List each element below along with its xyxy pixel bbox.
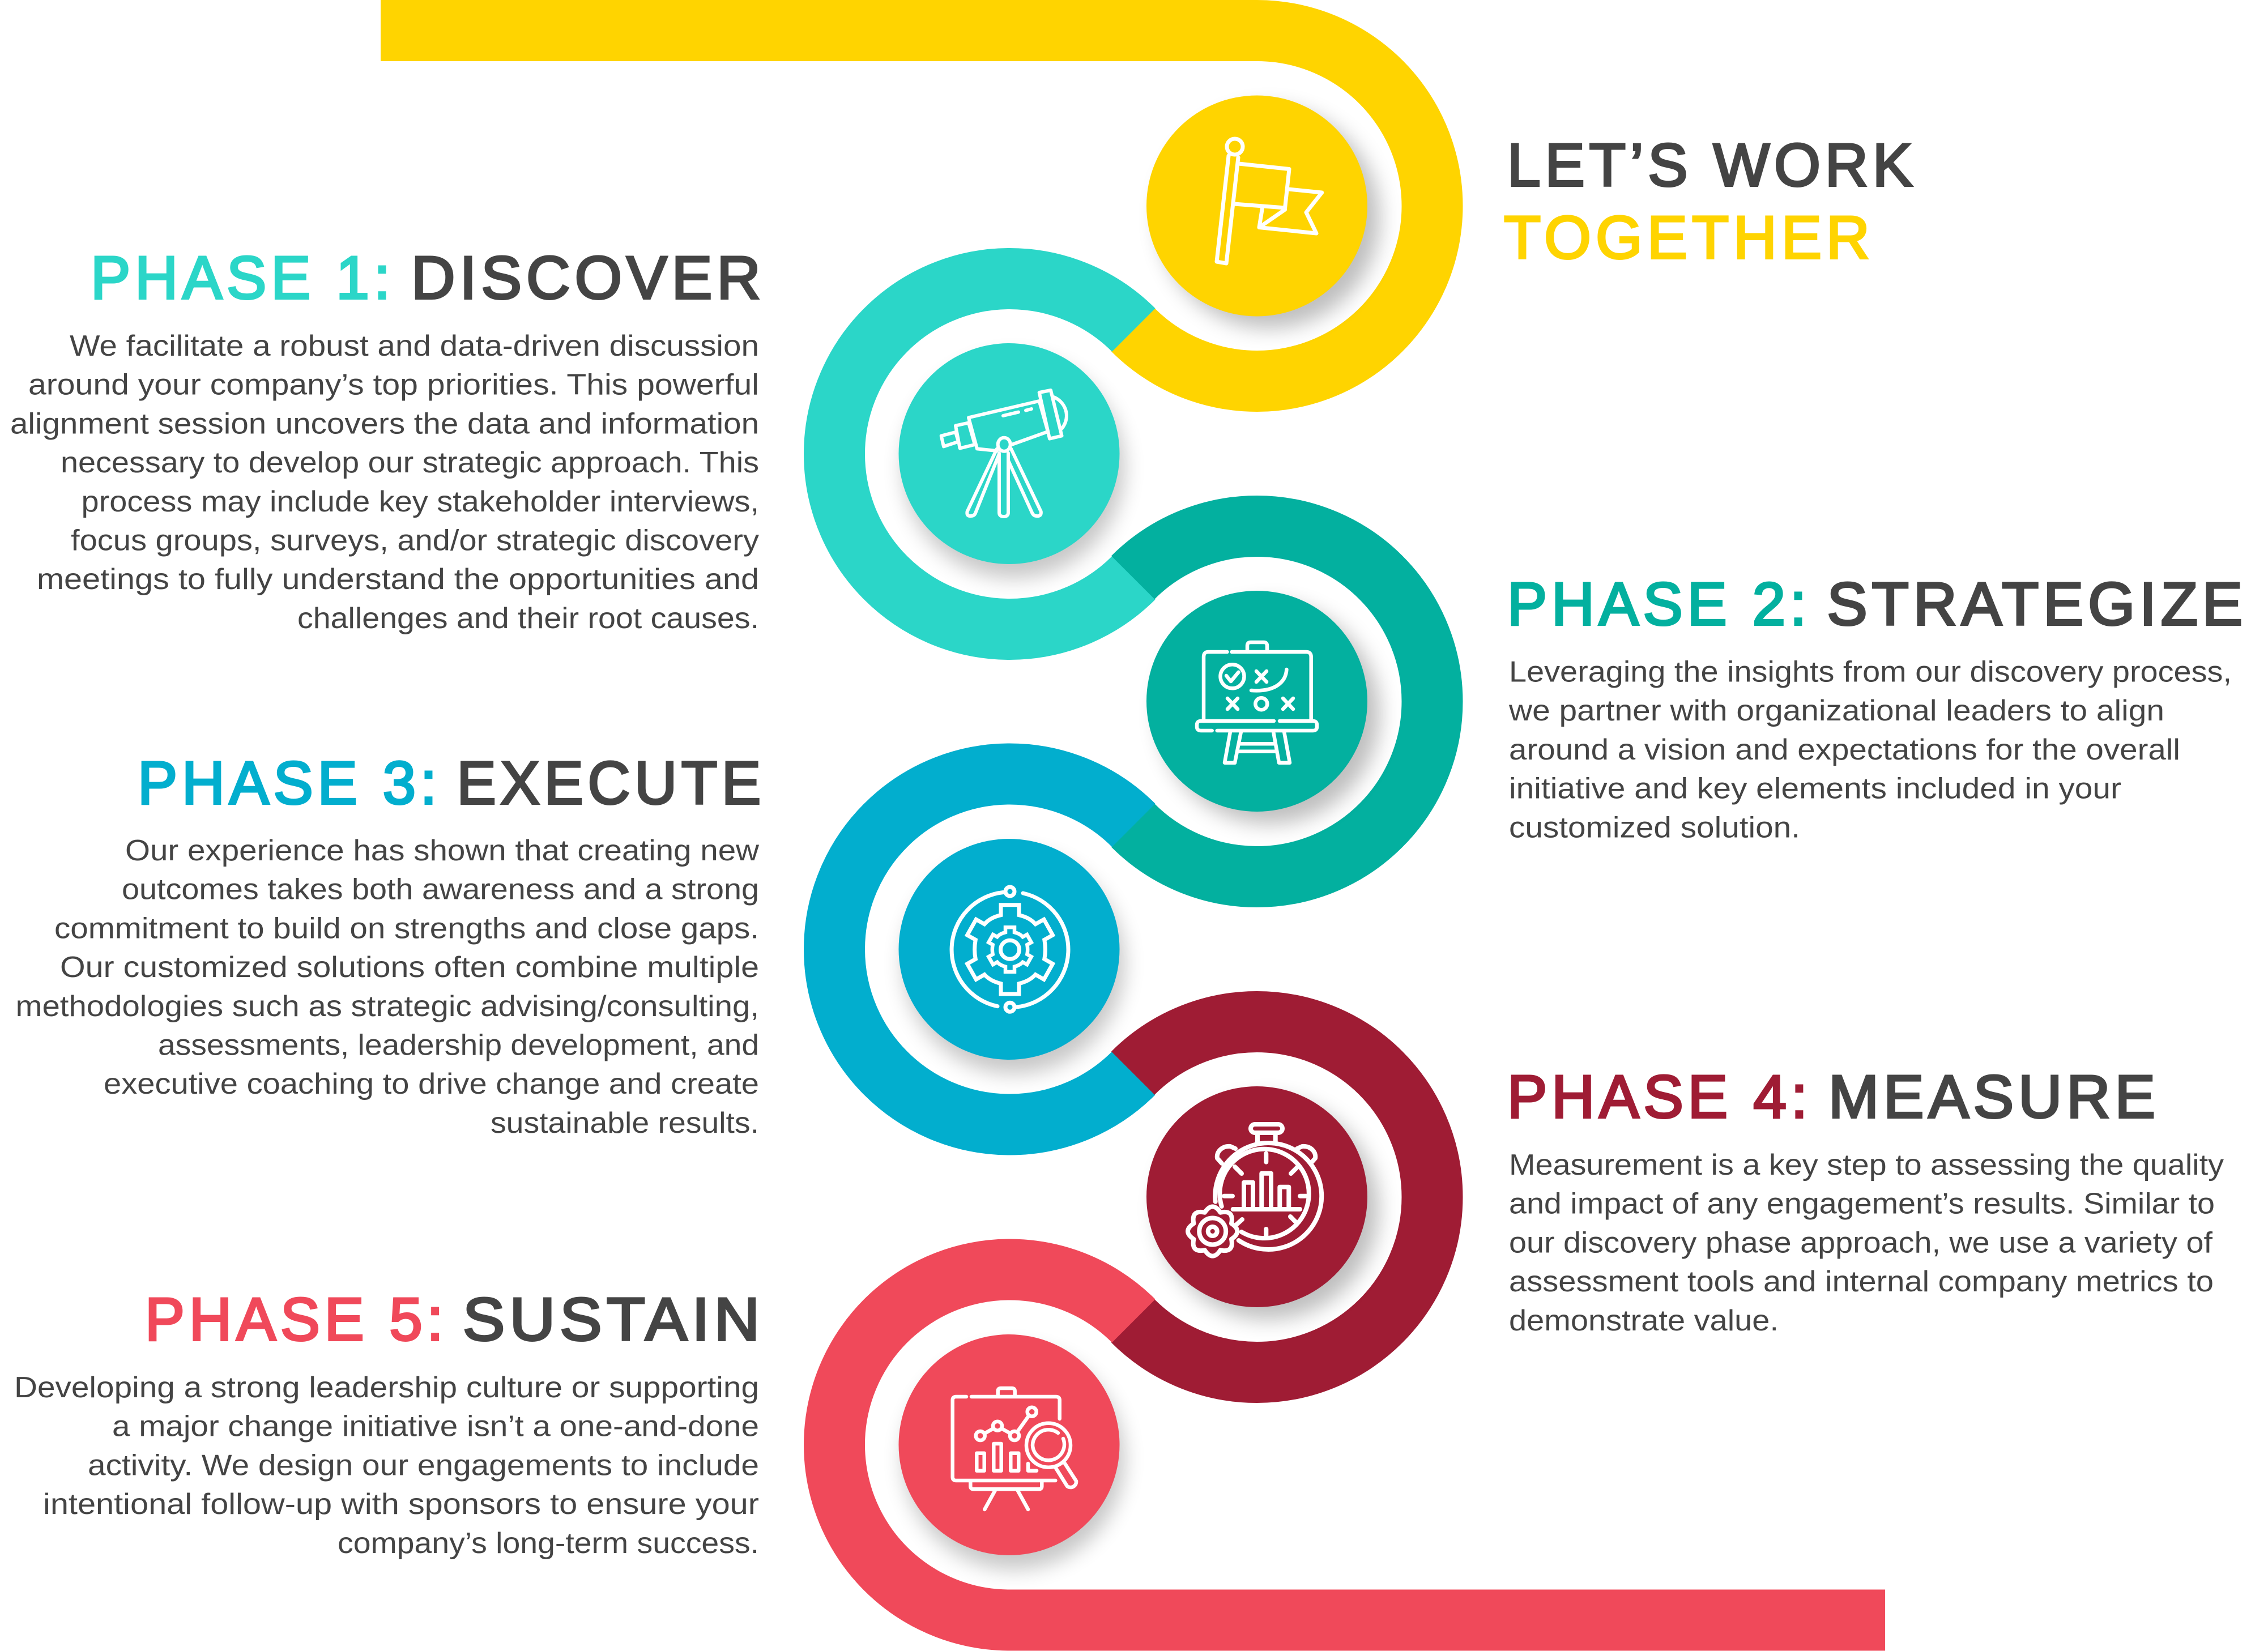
text block: phase 1 description: focus groups, surveys, and/or strategic discovery bbox=[71, 524, 759, 557]
heading: phase 5 sustain bbox=[145, 1285, 765, 1353]
text block: phase 2 description: we partner with organizational leaders to align bbox=[1508, 694, 2164, 727]
text block: phase 5 description: company’s long-term success. bbox=[338, 1527, 759, 1560]
icon badge: telescope bbox=[898, 343, 1124, 578]
icon badge: flag bbox=[1146, 95, 1380, 329]
heading: let's work together: TOGETHER bbox=[1504, 203, 1874, 271]
heading: phase 3 execute bbox=[138, 749, 765, 817]
text block: phase 5 description: Developing a strong leadership culture or supporting bbox=[14, 1371, 759, 1404]
heading: phase 1 discover: PHASE 1: bbox=[91, 244, 395, 312]
path segment: phase 2 green bbox=[1133, 526, 1432, 877]
text block: phase 4 description: demonstrate value. bbox=[1509, 1304, 1779, 1337]
text block: phase 1 description: necessary to develop our strategic approach. This bbox=[61, 446, 759, 479]
text block: phase 3 description: assessments, leadership development, and bbox=[158, 1029, 759, 1061]
heading: phase 5 sustain: PHASE 5: bbox=[145, 1285, 447, 1353]
text block: phase 4 description: Measurement is a key step to assessing the quality bbox=[1509, 1149, 2224, 1181]
path segment: phase 4 maroon bbox=[1133, 1022, 1432, 1372]
text block: phase 2 description bbox=[1508, 656, 2232, 844]
text block: phase 3 description: commitment to build on strengths and close gaps. bbox=[54, 912, 759, 945]
text block: phase 3 description: Our experience has shown that creating new bbox=[125, 834, 759, 867]
path segment: yellow start bbox=[381, 31, 1432, 381]
text block: phase 2 description: around a vision and expectations for the overall bbox=[1509, 733, 2180, 766]
text block: phase 2 description: Leveraging the insights from our discovery process, bbox=[1509, 656, 2232, 689]
path segment: phase 5 red bbox=[834, 1270, 1885, 1620]
text block: phase 2 description: initiative and key elements included in your bbox=[1509, 773, 2121, 805]
text block: phase 3 description bbox=[16, 834, 759, 1140]
text block: phase 4 description: assessment tools and internal company metrics to bbox=[1509, 1265, 2214, 1298]
text block: phase 3 description: methodologies such as strategic advising/consulting, bbox=[16, 990, 759, 1023]
text block: phase 3 description: outcomes takes both awareness and a strong bbox=[122, 873, 759, 906]
text block: phase 1 description bbox=[10, 330, 759, 635]
text block: phase 1 description: alignment session uncovers the data and information bbox=[10, 407, 759, 440]
text block: phase 1 description: around your company’s top priorities. This powerful bbox=[28, 369, 759, 402]
icon badge: stopwatch bbox=[1146, 1086, 1379, 1320]
text block: phase 1 description: process may include key stakeholder interviews, bbox=[82, 485, 759, 518]
heading: phase 3 execute: EXECUTE bbox=[457, 749, 765, 817]
heading: let's work together: LET’S WORK bbox=[1507, 131, 1917, 199]
heading: phase 4 measure: PHASE 4: bbox=[1507, 1063, 1812, 1130]
text block: phase 3 description: executive coaching to drive change and create bbox=[104, 1068, 759, 1100]
heading: phase 3 execute: PHASE 3: bbox=[138, 749, 441, 817]
text block: phase 1 description: We facilitate a robust and data-driven discussion bbox=[70, 330, 759, 362]
heading: phase 1 discover: DISCOVER bbox=[411, 244, 765, 312]
icon badge: presentation with magnifier bbox=[898, 1334, 1124, 1569]
heading: let's work together bbox=[1504, 131, 1917, 271]
icon badge: strategy board bbox=[1146, 591, 1380, 824]
text block: phase 4 description: and impact of any engagement’s results. Similar to bbox=[1509, 1188, 2215, 1221]
heading: phase 5 sustain: SUSTAIN bbox=[463, 1285, 765, 1353]
text block: phase 5 description: intentional follow-up with sponsors to ensure your bbox=[43, 1488, 759, 1521]
text block: phase 4 description bbox=[1509, 1149, 2224, 1337]
path segment: phase 1 teal bbox=[834, 279, 1133, 629]
heading: phase 1 discover bbox=[91, 244, 765, 312]
heading: phase 4 measure: MEASURE bbox=[1828, 1063, 2160, 1130]
heading: phase 2 strategize: PHASE 2: bbox=[1507, 570, 1811, 638]
text block: phase 1 description: meetings to fully understand the opportunities and bbox=[37, 563, 759, 596]
text block: phase 5 description bbox=[14, 1371, 759, 1560]
text block: phase 4 description: our discovery phase approach, we use a variety of bbox=[1509, 1226, 2213, 1259]
text block: phase 5 description: activity. We design our engagements to include bbox=[88, 1449, 759, 1482]
text block: phase 2 description: customized solution. bbox=[1509, 811, 1800, 844]
text block: phase 1 description: challenges and their root causes. bbox=[297, 602, 759, 635]
heading: phase 2 strategize bbox=[1507, 570, 2247, 638]
heading: phase 2 strategize: STRATEGIZE bbox=[1827, 570, 2247, 638]
icon badge: gears bbox=[898, 839, 1124, 1074]
text block: phase 3 description: Our customized solutions often combine multiple bbox=[60, 951, 759, 984]
text block: phase 5 description: a major change initiative isn’t a one-and-done bbox=[112, 1410, 759, 1443]
heading: phase 4 measure bbox=[1507, 1063, 2160, 1130]
text block: phase 3 description: sustainable results. bbox=[491, 1107, 759, 1140]
path segment: phase 3 blue bbox=[834, 774, 1133, 1125]
